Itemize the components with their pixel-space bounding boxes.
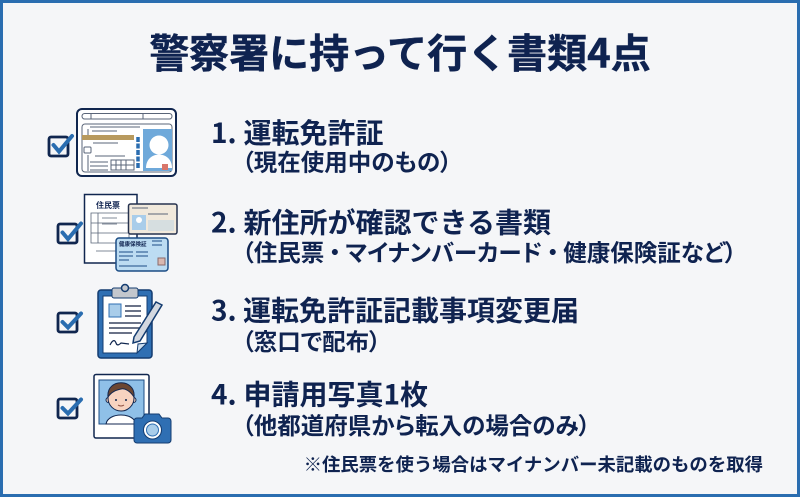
- sub text 2: （住民票・マイナンバーカード・健康保険証など）: [242, 234, 737, 268]
- checkbox 4: [58, 399, 81, 418]
- icon: resident record and cards: 住民票: [96, 200, 120, 210]
- heading 2: 新住所が確認できる書類: [244, 202, 551, 242]
- icon: driver licence: [77, 109, 176, 176]
- sub text 4: （他都道府県から転入の場合のみ）: [242, 407, 590, 441]
- title: 警察署に持って行く書類4点: [149, 22, 651, 80]
- icon: resident record and cards: [84, 194, 177, 271]
- checkbox 2: [58, 224, 81, 243]
- icon: ID photo and camera: [94, 374, 171, 443]
- heading 4: 申請用写真1枚: [244, 374, 428, 414]
- heading 1: 1.: [211, 112, 237, 152]
- heading 1: 運転免許証: [244, 112, 384, 152]
- heading 2: 2.: [211, 202, 237, 242]
- heading 3: 3.: [211, 290, 237, 330]
- sub text 1: （現在使用中のもの）: [242, 144, 452, 178]
- checkbox 1: [49, 136, 72, 156]
- icon: clipboard form with pen: [98, 284, 162, 358]
- heading 3: 運転免許証記載事項変更届: [243, 290, 579, 330]
- icon: resident record and cards: 健康保険証: [119, 240, 147, 248]
- sub text 3: （窓口で配布）: [242, 323, 381, 357]
- footnote: ※住民票を使う場合はマイナンバー未記載のものを取得: [304, 454, 763, 475]
- checkbox 3: [58, 313, 81, 332]
- heading 4: 4.: [211, 374, 237, 414]
